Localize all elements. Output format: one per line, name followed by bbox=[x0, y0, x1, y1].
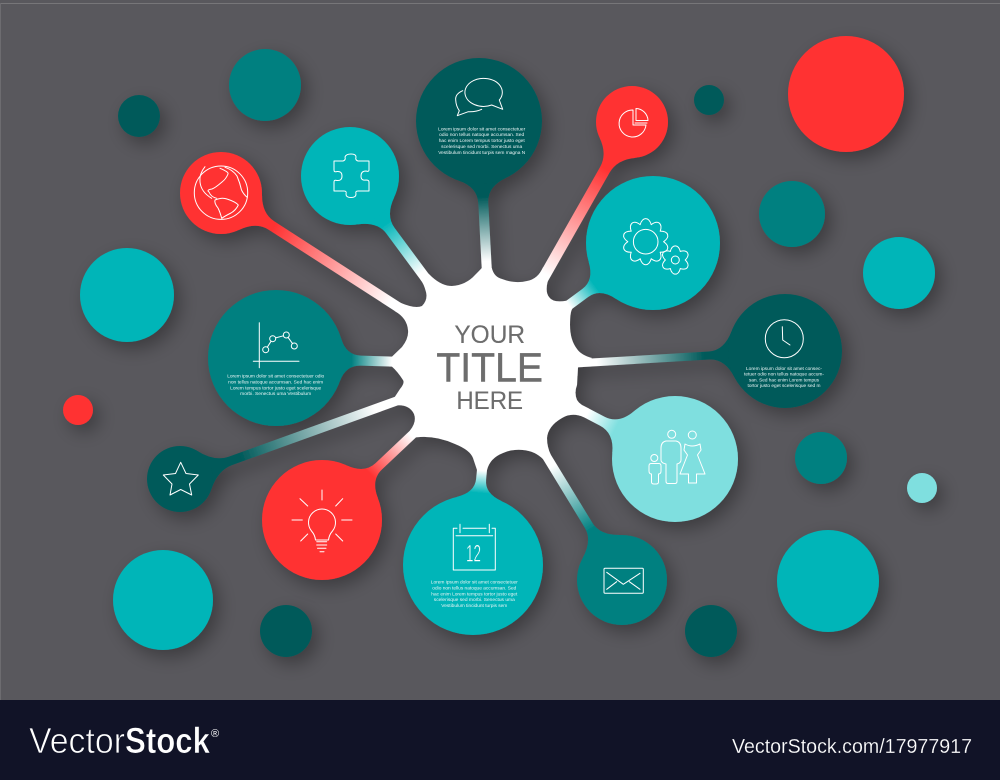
node: calendar bbox=[403, 463, 543, 635]
text: clock: tetuer odio non tellus natoque accum- bbox=[744, 372, 824, 378]
hub diagram bbox=[147, 58, 842, 635]
node: line chart bbox=[208, 290, 402, 426]
footer logo: Stock bbox=[125, 720, 211, 761]
central white blob bbox=[392, 267, 592, 470]
text: speech bubbles: scelerisque sed morbi. Senectus uma bbox=[441, 144, 523, 150]
icon: clock bbox=[765, 320, 803, 358]
text: clock bbox=[744, 366, 824, 389]
node: family bbox=[570, 389, 738, 522]
node: pie chart bbox=[518, 86, 668, 302]
text: calendar bbox=[431, 580, 518, 609]
text: calendar: Lorem ipsum dolor sit amet consectetuer bbox=[431, 580, 518, 586]
text: clock: Lorem ipsum dolor sit amet consec- bbox=[746, 366, 822, 372]
node: star bbox=[147, 379, 412, 512]
text: speech bubbles bbox=[438, 126, 526, 156]
icon: calendar bbox=[453, 524, 495, 570]
title bbox=[436, 321, 543, 415]
node: mail bbox=[525, 440, 667, 625]
text: line chart: non tellus natoque accumsan. Sed hac enim bbox=[228, 379, 323, 385]
icon: calendar: 12 bbox=[466, 541, 481, 568]
title: YOUR bbox=[454, 321, 525, 349]
icon: line chart bbox=[253, 323, 299, 368]
text: clock: san. Sed hac enim Lorem tempus bbox=[749, 377, 820, 383]
text: speech bubbles: odio non tellus natoque accumsan. Sed bbox=[439, 132, 525, 138]
node: puzzle bbox=[301, 127, 448, 297]
text: speech bubbles: hac enim Lorem tempus tortor justo eget bbox=[439, 138, 525, 144]
text: line chart: morbi. Senectus uma Vestibulum bbox=[240, 391, 311, 397]
footer logo bbox=[29, 720, 219, 761]
text: clock: tortor justo eget scelerisque sed m bbox=[748, 383, 820, 389]
node: light bulb bbox=[262, 413, 433, 580]
icon: family bbox=[649, 430, 705, 484]
icon: globe bbox=[194, 166, 248, 219]
text: calendar: Vestibulum tincidunt turpis sem bbox=[441, 603, 507, 609]
footer logo: ® bbox=[211, 728, 219, 740]
icon: pie chart bbox=[619, 108, 648, 137]
icon: light bulb bbox=[292, 490, 352, 552]
footer bar bbox=[0, 700, 1000, 780]
icon: gears bbox=[622, 219, 690, 274]
text: calendar: hac enim Lorem tempus tortor justo eget bbox=[431, 591, 518, 597]
title: TITLE bbox=[436, 345, 543, 391]
icon: speech bubbles bbox=[456, 78, 503, 116]
node: clock bbox=[571, 294, 842, 408]
icon: puzzle piece bbox=[334, 154, 369, 198]
node: globe bbox=[180, 152, 422, 333]
node: gears bbox=[549, 176, 720, 328]
text: speech bubbles: Lorem ipsum dolor sit amet consectetuer bbox=[438, 126, 526, 132]
text: calendar: odio non tellus natoque accumsan. Sed bbox=[432, 585, 517, 591]
node: speech bubbles bbox=[416, 58, 542, 277]
text: line chart: Lorem tempus tortor justo eget scelerisque bbox=[230, 385, 322, 391]
footer id: VectorStock.com/17977917 bbox=[732, 736, 972, 758]
text: speech bubbles: Vestibulum tincidunt turpis sem magna N bbox=[438, 150, 526, 156]
text: line chart bbox=[227, 374, 325, 397]
title: HERE bbox=[456, 387, 523, 415]
icon: star bbox=[163, 462, 198, 495]
text: calendar: scelerisque sed morbi. Senectus uma bbox=[434, 597, 515, 603]
decorative circles bbox=[63, 36, 937, 657]
icon: envelope bbox=[604, 568, 643, 593]
footer logo: Vector bbox=[29, 720, 125, 761]
text: line chart: Lorem ipsum dolor sit amet consectetuer odio bbox=[227, 374, 325, 380]
